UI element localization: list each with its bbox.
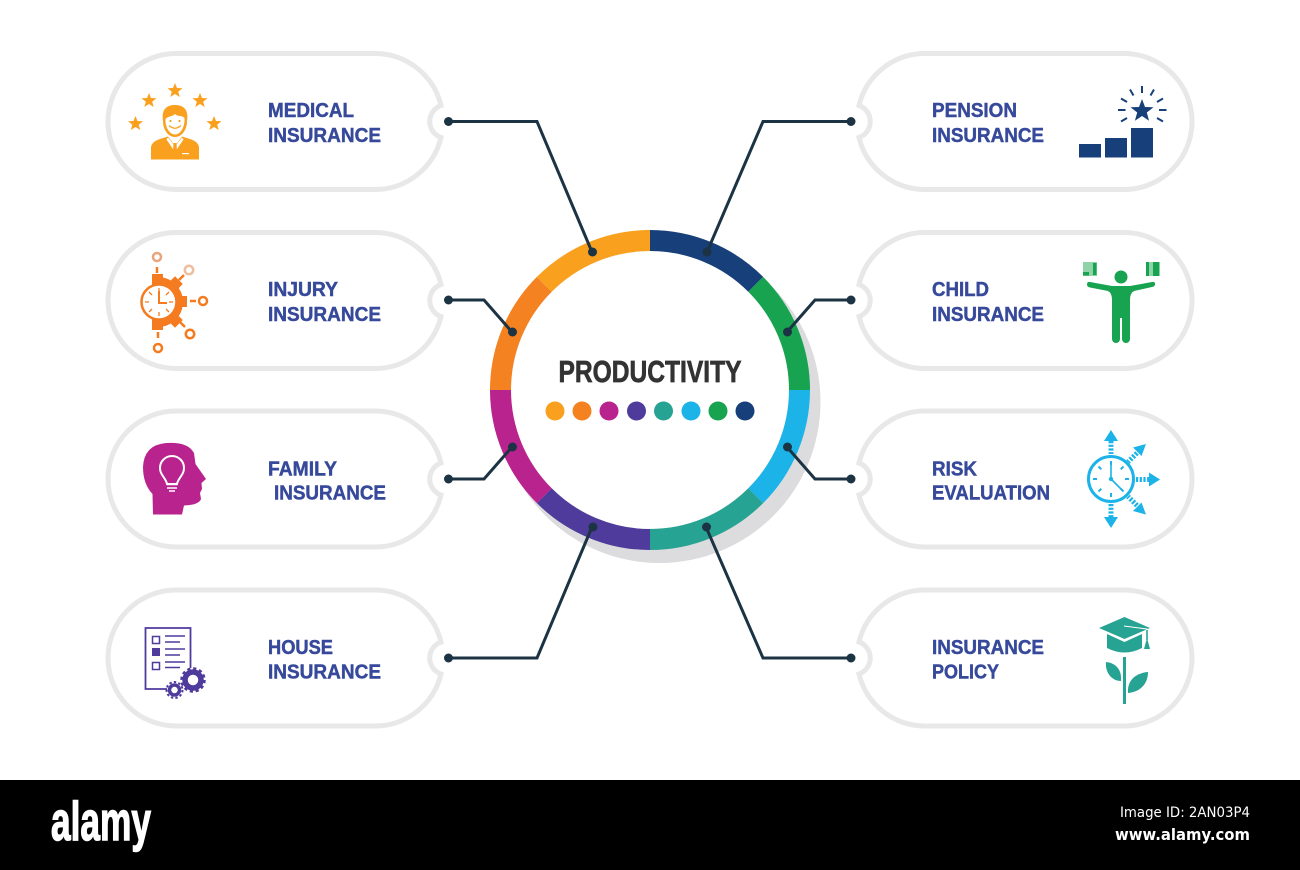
icon: figure holding two boxes bbox=[1083, 262, 1160, 343]
label: pension insurance: INSURANCE bbox=[932, 125, 1044, 147]
panel: insurance policy bbox=[859, 590, 1192, 726]
panel: house insurance bbox=[108, 590, 441, 726]
label: pension insurance: PENSION bbox=[932, 100, 1017, 122]
image id: Image ID: 2AN03P4 bbox=[1120, 805, 1250, 821]
connector: risk evaluation bbox=[783, 442, 856, 484]
icon: rising bars with star bbox=[1079, 86, 1166, 158]
label: house insurance bbox=[268, 637, 381, 684]
label: insurance policy bbox=[932, 637, 1044, 684]
connector: family insurance bbox=[444, 442, 517, 484]
label: injury insurance: INSURANCE bbox=[268, 304, 381, 326]
connector: medical insurance bbox=[444, 117, 597, 256]
label: medical insurance bbox=[268, 100, 381, 147]
label: injury insurance bbox=[268, 279, 381, 326]
connector: pension insurance bbox=[702, 117, 856, 256]
label: pension insurance bbox=[932, 100, 1044, 147]
connector: child insurance bbox=[783, 296, 856, 336]
colour dots bbox=[546, 402, 754, 420]
label: risk evaluation: RISK bbox=[932, 458, 978, 480]
panel: child insurance bbox=[859, 232, 1192, 368]
title: PRODUCTIVITY bbox=[558, 354, 742, 389]
label: injury insurance: INJURY bbox=[268, 279, 339, 301]
footer logo: alamy bbox=[51, 790, 151, 852]
label: insurance policy: INSURANCE bbox=[932, 637, 1044, 659]
icon: clock with arrows bbox=[1088, 430, 1160, 528]
label: family insurance: INSURANCE bbox=[274, 482, 386, 504]
label: house insurance: HOUSE bbox=[268, 637, 333, 659]
label: family insurance bbox=[268, 458, 386, 504]
panel: medical insurance bbox=[108, 54, 441, 190]
panel: family insurance bbox=[108, 411, 441, 547]
label: risk evaluation: EVALUATION bbox=[932, 482, 1050, 504]
connector: house insurance bbox=[444, 522, 598, 662]
panel: injury insurance bbox=[108, 232, 441, 368]
label: house insurance: INSURANCE bbox=[268, 662, 381, 684]
label: family insurance: FAMILY bbox=[268, 458, 338, 480]
connector: insurance policy bbox=[702, 522, 856, 662]
label: child insurance: CHILD bbox=[932, 279, 989, 301]
panel: pension insurance bbox=[859, 54, 1192, 190]
footer bar bbox=[0, 780, 1300, 870]
panel: risk evaluation bbox=[859, 411, 1192, 547]
label: medical insurance: INSURANCE bbox=[268, 125, 381, 147]
website: www.alamy.com bbox=[1115, 825, 1250, 844]
label: child insurance bbox=[932, 279, 1044, 326]
label: insurance policy: POLICY bbox=[932, 662, 1000, 684]
label: child insurance: INSURANCE bbox=[932, 304, 1044, 326]
icon: head with light bulb bbox=[143, 443, 206, 514]
icon: clock gear with nodes bbox=[142, 253, 207, 352]
connector: injury insurance bbox=[444, 296, 517, 336]
ring shadow bbox=[498, 241, 820, 563]
icon: graduation cap plant bbox=[1099, 617, 1150, 704]
icon: person with stars bbox=[128, 83, 222, 160]
icon: checklist with gears bbox=[146, 628, 204, 698]
label: risk evaluation bbox=[932, 458, 1050, 504]
label: medical insurance: MEDICAL bbox=[268, 100, 354, 122]
chart: segmented ring bbox=[500, 240, 800, 540]
